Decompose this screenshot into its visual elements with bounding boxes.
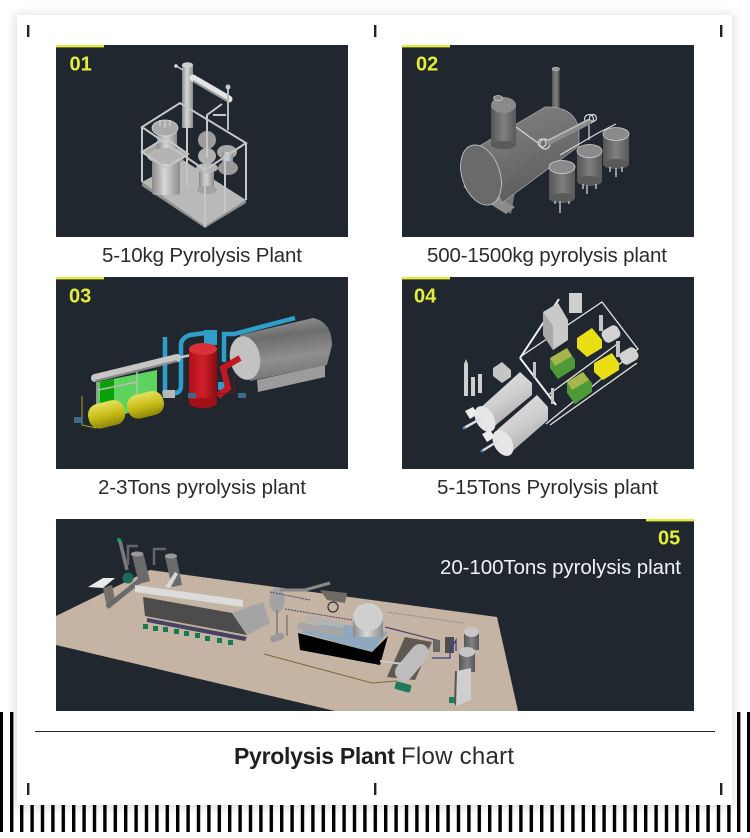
accent bar 04 — [402, 277, 450, 279]
footer title: Pyrolysis Plant — [234, 743, 395, 769]
barcode stripes: bottom — [20, 800, 732, 832]
number 01: 01 — [70, 54, 92, 76]
footer title: Flow chart — [401, 743, 514, 770]
barcode stripes: right side — [737, 712, 750, 832]
number 03: 03 — [69, 286, 91, 308]
caption 01: 5-10kg Pyrolysis Plant — [102, 244, 302, 267]
number 05: 05 — [658, 528, 680, 550]
panel 02: 500-1500kg plant — [402, 45, 694, 237]
caption 03: 2-3Tons pyrolysis plant — [98, 476, 306, 499]
scene: continuous plant on beige floor — [56, 538, 518, 711]
panel 01: 5-10kg plant — [56, 45, 348, 237]
accent bar 03 — [56, 277, 104, 279]
caption 04: 5-15Tons Pyrolysis plant — [437, 476, 658, 499]
panel 03: 2-3 tons plant — [56, 277, 348, 469]
divider line — [35, 731, 715, 732]
number 04: 04 — [414, 286, 437, 308]
caption 05: 20-100Tons pyrolysis plant — [440, 556, 681, 579]
icon: small skid-mounted plant — [142, 62, 246, 228]
panel 05: 20-100 tons plant — [56, 519, 694, 711]
icon: double-line plant layout — [462, 293, 640, 460]
icon: coloured plant with red and grey vessels — [74, 318, 332, 431]
footer title — [234, 743, 514, 770]
barcode stripes: left side — [0, 712, 13, 832]
accent bar 05 — [646, 519, 694, 521]
panel 04: 5-15 tons plant — [402, 277, 694, 469]
accent bar 01 — [56, 45, 104, 47]
accent bar 02 — [402, 45, 450, 47]
number 02: 02 — [416, 54, 438, 76]
icon: horizontal reactor with three tanks — [453, 67, 629, 214]
caption 02: 500-1500kg pyrolysis plant — [427, 244, 667, 267]
